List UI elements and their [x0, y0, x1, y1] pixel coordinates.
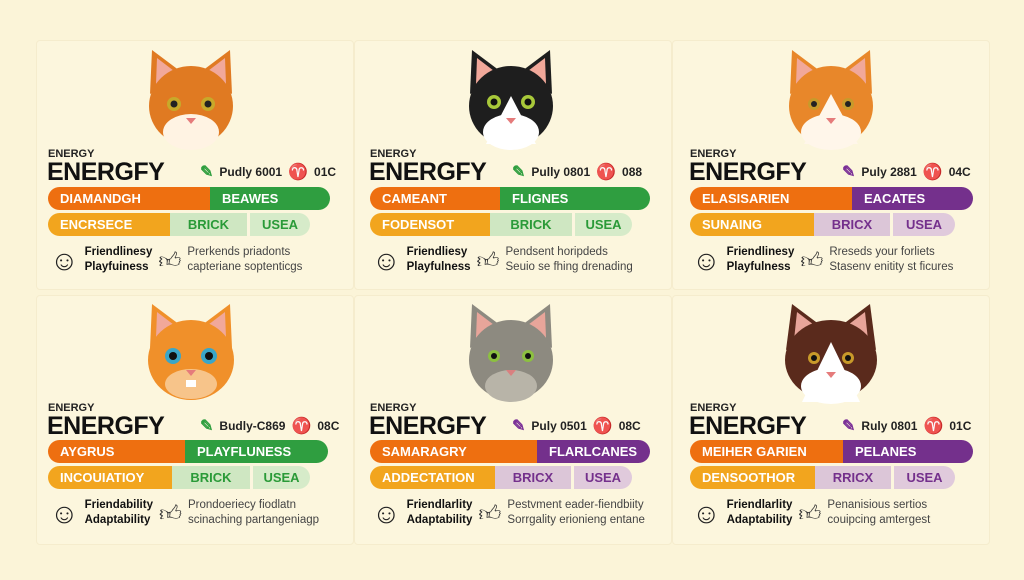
- text block: all panels: Puly 0501 08C: [531, 419, 641, 433]
- text block: all panels: Friendability: [85, 499, 153, 511]
- text block: all panels: Pendsent horipdeds: [506, 246, 608, 258]
- panel: cat 3: [672, 40, 990, 290]
- text block: all panels: ENERGFY: [369, 158, 486, 186]
- text block: all panels: ♈: [593, 418, 613, 435]
- text block: all panels: Pudly 6001 01C: [219, 165, 336, 179]
- text block: all panels: ☺: [50, 498, 79, 528]
- text block: all panels: DENSOOTHOR: [702, 470, 795, 485]
- text block: all panels: ENERGY: [690, 402, 736, 414]
- text block: all panels: ✎: [842, 418, 855, 435]
- text block: all panels: ✎: [200, 164, 213, 181]
- text block: all panels: SUNAING: [702, 217, 762, 232]
- text block: all panels: Prerkends priadonts: [187, 246, 290, 258]
- text block: all panels: BRICK: [190, 470, 232, 485]
- text block: all panels: Playfuiness: [85, 261, 149, 273]
- text block: all panels: Playfulness: [727, 261, 791, 273]
- text block: all panels: ✎: [512, 164, 525, 181]
- panel: cat 4: [36, 295, 354, 545]
- panel: cat 1: [36, 40, 354, 290]
- text block: all panels: CAMEANT: [382, 191, 447, 206]
- text block: all panels: USEA: [906, 217, 942, 232]
- text block: all panels: BRICK: [510, 217, 552, 232]
- text block: all panels: EACATES: [864, 191, 925, 206]
- text block: all panels: ELASISARIEN: [702, 191, 789, 206]
- text block: all panels: Penanisious sertios: [827, 499, 927, 511]
- text block: all panels: AYGRUS: [60, 444, 114, 459]
- text block: all panels: Sorrgality erionieng entane: [507, 514, 645, 526]
- text block: all panels: ENERGFY: [689, 158, 806, 186]
- text block: all panels: ♈: [291, 418, 311, 435]
- text block: all panels: Adaptability: [407, 514, 472, 526]
- text block: all panels: PELANES: [855, 444, 916, 459]
- text block: all panels: USEA: [585, 217, 622, 232]
- text block: all panels: PLAYFLUNESS: [197, 444, 291, 459]
- text block: all panels: ENERGFY: [47, 158, 164, 186]
- text block: all panels: ♈: [923, 418, 943, 435]
- text block: all panels: Friendlinesy: [727, 246, 794, 258]
- text block: all panels: ♈: [288, 164, 308, 181]
- text block: all panels: Adaptability: [85, 514, 150, 526]
- text block: all panels: Friendlarlity: [407, 499, 472, 511]
- text block: all panels: ☺: [692, 244, 721, 276]
- text block: all panels: BEAWES: [222, 191, 278, 206]
- text block: all panels: ☺: [50, 244, 79, 276]
- text block: all panels: ☺: [372, 498, 401, 528]
- text block: all panels: ♈: [923, 164, 943, 181]
- text block: all panels: FLIGNES: [512, 191, 568, 206]
- text block: all panels: SAMARAGRY: [382, 444, 467, 459]
- text block: all panels: BRICK: [188, 217, 229, 232]
- text block: all panels: RRICX: [833, 470, 873, 485]
- text block: all panels: ☺: [372, 244, 401, 276]
- text block: all panels: capteriane soptenticgs: [187, 261, 302, 273]
- text block: all panels: ENERGFY: [689, 412, 806, 440]
- text block: all panels: USEA: [585, 470, 621, 485]
- text block: all panels: ✎: [200, 418, 213, 435]
- text block: all panels: ✎: [512, 418, 525, 435]
- text block: all panels: ENERGY: [48, 148, 94, 160]
- text block: all panels: 👍︎: [800, 248, 823, 272]
- icon: orange tabby cat: [149, 50, 233, 137]
- text block: all panels: ENERGY: [48, 402, 94, 414]
- text block: all panels: Adaptability: [727, 514, 792, 526]
- panel: cat 2: [354, 40, 672, 290]
- text block: all panels: DIAMANDGH: [60, 191, 141, 206]
- text block: all panels: ENCRSECE: [60, 217, 132, 232]
- text block: all panels: MEIHER GARIEN: [702, 444, 807, 459]
- text block: all panels: couipcing amtergest: [827, 514, 930, 526]
- text block: all panels: Playfulness: [407, 261, 471, 273]
- text block: all panels: 👍︎: [478, 500, 501, 526]
- panel: cat 5: [354, 295, 672, 545]
- icon: gray tabby cat: [469, 304, 553, 402]
- text block: all panels: ☺: [692, 498, 721, 528]
- text block: all panels: BRICX: [832, 217, 872, 232]
- text block: all panels: Pestvment eader-fiendbiity: [507, 499, 644, 511]
- text block: all panels: ENERGFY: [369, 412, 486, 440]
- icon: black and white cat: [469, 50, 553, 150]
- text block: all panels: ♈: [596, 164, 616, 181]
- text block: all panels: ENERGY: [370, 402, 416, 414]
- text block: all panels: 👍︎: [158, 248, 181, 272]
- text block: all panels: BRICX: [513, 470, 553, 485]
- text block: all panels: Pully 0801 088: [531, 165, 642, 179]
- text block: all panels: Budly-C869 08C: [219, 419, 339, 433]
- text block: all panels: ENERGFY: [47, 412, 164, 440]
- text block: all panels: Puly 2881 04C: [861, 165, 971, 179]
- text block: all panels: Stasenv enitity st ficures: [829, 261, 953, 273]
- text block: all panels: USEA: [263, 470, 300, 485]
- text block: all panels: FODENSOT: [382, 217, 454, 232]
- text block: all panels: Friendliesy: [407, 246, 467, 258]
- panel: cat 6: [672, 295, 990, 545]
- text block: all panels: 👍︎: [477, 248, 500, 272]
- text block: all panels: Friendlinesy: [85, 246, 152, 258]
- text block: all panels: USEA: [262, 217, 298, 232]
- text block: all panels: 👍︎: [798, 500, 821, 526]
- icon: orange and white cat: [789, 50, 873, 150]
- text block: all panels: FLARLCANES: [549, 444, 637, 459]
- text block: all panels: USEA: [906, 470, 943, 485]
- text block: all panels: INCOUIATIOY: [60, 470, 144, 485]
- text block: all panels: ENERGY: [370, 148, 416, 160]
- text block: all panels: Seuio se fhing drenading: [506, 261, 633, 273]
- icon: orange blue-eyed cat: [148, 304, 234, 400]
- text block: all panels: ADDECTATION: [382, 470, 475, 485]
- icon: brown and white cat: [785, 304, 877, 404]
- text block: all panels: Prondoeriecy fiodlatn: [188, 499, 296, 511]
- text block: all panels: Rreseds your forliets: [829, 246, 935, 258]
- text block: all panels: Friendlarlity: [727, 499, 792, 511]
- text block: all panels: ✎: [842, 164, 855, 181]
- text block: all panels: scinaching partangeniagp: [188, 514, 319, 526]
- text block: all panels: 👍︎: [159, 500, 182, 526]
- text block: all panels: ENERGY: [690, 148, 736, 160]
- text block: all panels: Ruly 0801 01C: [861, 419, 971, 433]
